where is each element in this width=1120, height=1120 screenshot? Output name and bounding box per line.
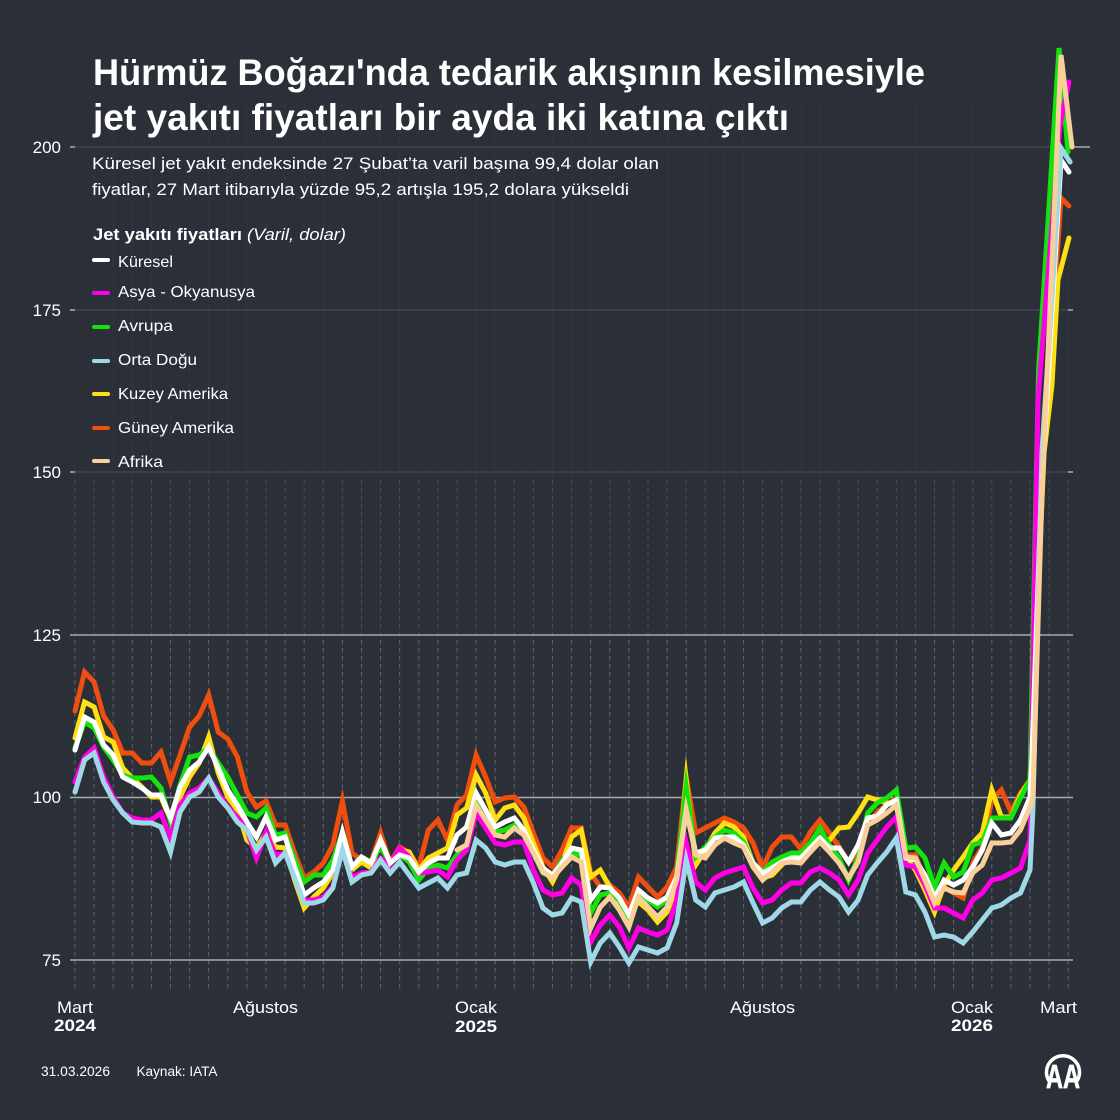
icon: AA logo: AA (1046, 1058, 1080, 1095)
line: Afrika (457, 55, 1072, 928)
title: jet yakıtı fiyatları bir ayda iki katına çıktı (92, 97, 789, 138)
x axis labels: 2024 (54, 1016, 97, 1035)
legend item: Avrupa (92, 318, 173, 335)
icon: AA logo (1046, 1056, 1080, 1095)
line: Güney Amerika (75, 198, 1069, 907)
line: Küresel (75, 160, 1069, 915)
title (92, 52, 925, 138)
y axis labels: 175 (33, 301, 61, 320)
legend (92, 225, 346, 471)
title: Hürmüz Boğazı'nda tedarik akışının kesilmesiyle (93, 52, 925, 93)
legend item: Orta Doğu: Orta Doğu (118, 352, 197, 369)
x axis labels: Mart (57, 998, 93, 1017)
legend item: Güney Amerika: Güney Amerika (118, 420, 234, 437)
legend item: Kuzey Amerika: Kuzey Amerika (118, 386, 228, 403)
x axis labels: Ocak (455, 998, 498, 1017)
legend item: Afrika (92, 454, 163, 471)
legend title (93, 225, 346, 244)
y axis labels (33, 138, 61, 970)
footer: date and source (41, 1064, 218, 1079)
x axis labels: Ocak (951, 998, 994, 1017)
legend item: Küresel (92, 254, 173, 271)
subtitle: Küresel jet yakıt endeksinde 27 Şubat’ta varil başına 99,4 dolar olan (92, 154, 659, 173)
y axis labels: 150 (33, 463, 61, 482)
subtitle: fiyatlar, 27 Mart itibarıyla yüzde 95,2 artışla 195,2 dolara yükseldi (92, 180, 629, 199)
legend item: Küresel: Küresel (118, 254, 173, 271)
x axis labels: 2026 (951, 1016, 993, 1035)
x axis labels: Ağustos (730, 998, 795, 1017)
x axis labels: Ağustos (233, 998, 298, 1017)
y axis labels: 75 (42, 951, 61, 970)
legend item: Avrupa: Avrupa (118, 318, 173, 335)
line: Asya - Okyanusya (75, 82, 1069, 948)
subtitle (92, 154, 659, 199)
line: Avrupa (75, 48, 1068, 917)
footer: date and source: Kaynak: IATA (136, 1064, 218, 1079)
x axis labels: 2025 (455, 1017, 497, 1036)
footer: date and source: 31.03.2026 (41, 1064, 110, 1079)
legend item: Asya - Okyanusya: Asya - Okyanusya (118, 284, 255, 301)
horizontal grid lines (70, 147, 1090, 960)
line: Kuzey Amerika (75, 238, 1069, 922)
x axis labels (54, 998, 1077, 1036)
y axis labels: 200 (33, 138, 61, 157)
legend title: (Varil, dolar) (247, 225, 346, 244)
vertical dashed grid (74, 100, 1070, 989)
legend item: Afrika: Afrika (118, 454, 163, 471)
x axis labels: Mart (1040, 998, 1077, 1017)
y axis labels: 125 (33, 626, 61, 645)
line: Orta Doğu (75, 148, 1070, 963)
legend title: Jet yakıtı fiyatları (93, 225, 242, 244)
y axis labels: 100 (33, 788, 61, 807)
